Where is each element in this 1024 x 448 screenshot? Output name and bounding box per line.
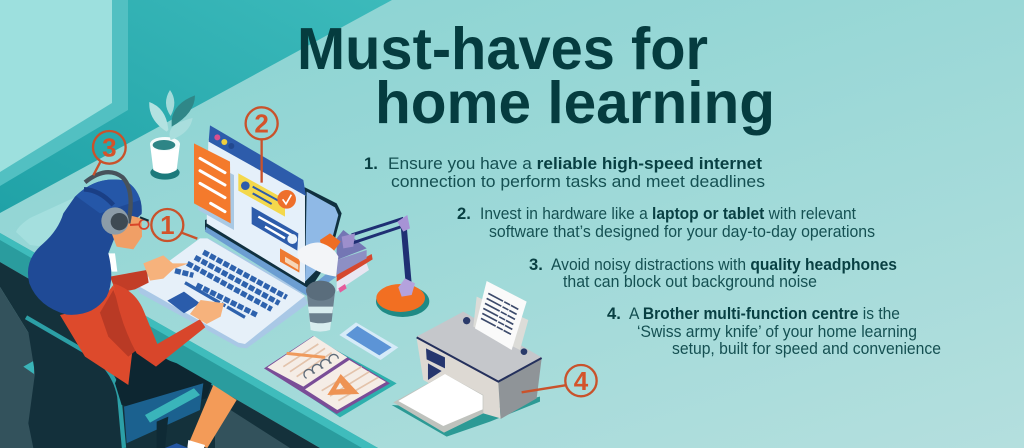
leg: [189, 385, 237, 448]
small orange card: [280, 248, 300, 273]
callout 1: 1: [160, 210, 175, 240]
icon: potted plant: [149, 90, 195, 180]
printer shadow: [392, 397, 540, 437]
item 4 text: setup, built for speed and convenience: [672, 339, 941, 358]
item 3 text: [529, 255, 897, 291]
title: [297, 16, 775, 136]
callout 2: 2: [254, 109, 269, 139]
callout 3: 3: [102, 133, 117, 163]
coffee cup: [306, 281, 335, 332]
callout 4: [522, 365, 597, 396]
item 3 text: 3.: [529, 255, 543, 274]
item 3 text: that can block out background noise: [563, 272, 817, 291]
printer paper output: [473, 297, 528, 350]
chair: [23, 317, 124, 448]
printer body: [417, 338, 501, 418]
collar: [107, 253, 117, 272]
illustration: woman with headset: [23, 172, 237, 448]
book stack: [337, 230, 373, 293]
item 2 text: 2.: [457, 204, 471, 223]
red sweater: [60, 270, 205, 385]
screen back and frame: [205, 187, 342, 292]
screen display: [207, 140, 305, 283]
item 1 text: Ensure you have a reliable high-speed internet: [388, 154, 762, 173]
item 4 text: A Brother multi-function centre is the: [629, 304, 900, 323]
keyboard keys: [175, 252, 287, 317]
blue card: [252, 207, 298, 251]
notebook: [264, 336, 397, 417]
face: [112, 215, 142, 249]
item 2 text: software that’s designed for your day-to-day operations: [489, 222, 875, 241]
callout 2: [246, 107, 278, 183]
hair: [28, 179, 142, 315]
paper tray: [393, 374, 483, 433]
illustration: laptop: [137, 125, 342, 348]
lamp arm: [342, 215, 415, 297]
yellow check card: [238, 173, 285, 217]
lamp head: [320, 233, 341, 252]
item 4 text: ‘Swiss army knife’ of your home learning: [637, 322, 917, 341]
laptop keyboard base: [137, 238, 308, 348]
desk front and floor: [0, 195, 378, 448]
glasses: [130, 217, 149, 229]
title: Must-haves for: [297, 16, 708, 82]
desk items and printer: [264, 281, 542, 437]
printer: [392, 281, 542, 437]
hands: [143, 255, 189, 281]
item 1 text: connection to perform tasks and meet deadlines: [391, 172, 765, 191]
callout 3: [93, 131, 126, 175]
callout 4: 4: [574, 366, 589, 396]
item 4 text: 4.: [607, 304, 621, 323]
wall and window: [0, 0, 392, 213]
phone: [339, 322, 398, 360]
item 4 text: [607, 304, 941, 358]
headset: [85, 172, 131, 235]
item 3 text: Avoid noisy distractions with quality headphones: [551, 255, 897, 274]
armrest: [145, 388, 200, 448]
illustration: desk lamp and books: [297, 215, 429, 317]
callout 1: [151, 209, 197, 241]
item 2 text: Invest in hardware like a laptop or tablet with relevant: [480, 204, 856, 223]
item 1 text: [364, 154, 765, 191]
item 2 text: [457, 204, 875, 241]
lamp base: [376, 286, 429, 317]
orange side panel: [198, 157, 234, 230]
title: home learning: [375, 70, 775, 136]
item 1 text: 1.: [364, 154, 378, 173]
skirt and seat: [115, 347, 212, 412]
